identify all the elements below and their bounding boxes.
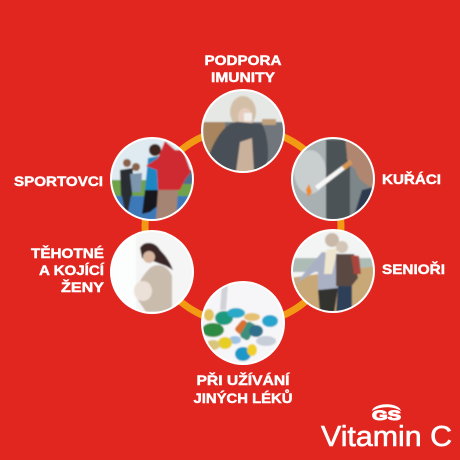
- label: při užívání jiných léků: [194, 373, 292, 406]
- label: podpora imunity: PODPORA: [204, 53, 282, 68]
- label: podpora imunity: IMUNITY: [211, 70, 275, 85]
- label: podpora imunity: [204, 53, 282, 85]
- label: při užívání jiných léků: JINÝCH LÉKŮ: [194, 390, 292, 406]
- photo: pregnant woman: [109, 229, 195, 315]
- label: při užívání jiných léků: PŘI UŽÍVÁNÍ: [196, 373, 291, 388]
- connecting ring: [145, 128, 341, 324]
- logo: GS Vitamin C: Vitamin C: [321, 421, 452, 453]
- photo: seniors: [290, 228, 376, 314]
- label: sportovci: SPORTOVCI: [14, 174, 103, 189]
- label: senioři: SENIOŘI: [382, 262, 445, 277]
- photo: runners: [109, 136, 196, 222]
- logo: GS Vitamin C: GS: [372, 407, 401, 423]
- label: těhotné a kojící ženy: A KOJÍCÍ: [39, 263, 105, 278]
- label: těhotné a kojící ženy: [31, 246, 105, 295]
- label: těhotné a kojící ženy: ŽENY: [61, 280, 104, 295]
- photo: woman with a cold: [200, 88, 286, 174]
- photo: pills: [200, 280, 286, 366]
- label: kuřáci: KUŘÁCI: [382, 172, 441, 187]
- photo: smoker: [290, 136, 378, 222]
- label: těhotné a kojící ženy: TĚHOTNÉ: [31, 246, 104, 261]
- logo: GS Vitamin C: [321, 404, 452, 453]
